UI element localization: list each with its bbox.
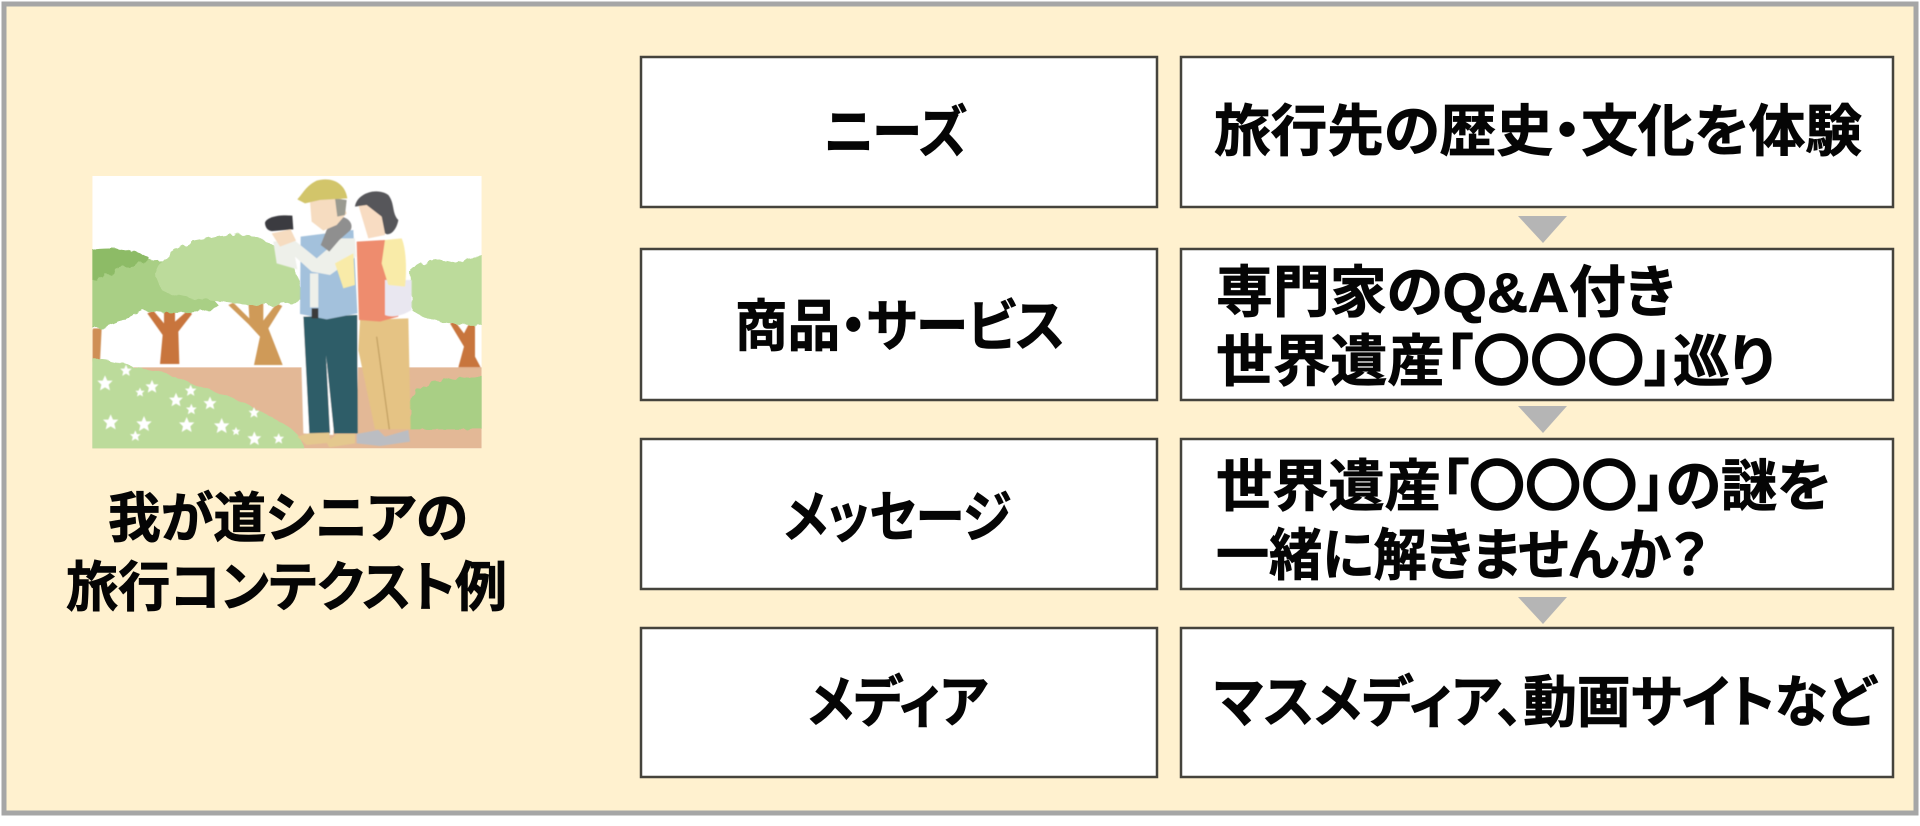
man [265, 179, 359, 447]
row 2 content: 世界遺産「〇〇〇」巡り [1216, 330, 1775, 393]
woman [335, 191, 412, 446]
path [92, 367, 482, 448]
row 4 content: マスメディア、動画サイトなど [1214, 671, 1879, 734]
heading: 旅行コンテクスト例 [66, 558, 507, 618]
row 1 content [1181, 57, 1893, 207]
flower bush [88, 359, 305, 452]
row 2 content [1181, 249, 1893, 400]
flowers [97, 365, 284, 445]
row 1 content: 旅行先の歴史・文化を体験 [1214, 100, 1862, 163]
row 3 label: message [641, 439, 1157, 589]
row 2 content: 専門家のQ&A付き [1216, 261, 1675, 324]
row 3 content: 一緒に解きませんか？ [1216, 524, 1708, 587]
heading: 我が道シニアの [108, 489, 468, 549]
row 4 label: media: メディア [808, 671, 988, 734]
illustration: senior couple taking a photo in a park [88, 176, 488, 452]
row 2 label: product and service [641, 249, 1157, 400]
trunks [92, 302, 481, 367]
row 4 label: media [641, 628, 1157, 777]
arrow 1 [1518, 216, 1567, 243]
row 3 content [1181, 439, 1893, 589]
row 4 content [1181, 628, 1893, 777]
row 3 label: message: メッセージ [784, 486, 1011, 549]
right bush [410, 375, 488, 429]
tree foliage [90, 235, 487, 330]
row 3 content: 世界遺産「〇〇〇」の謎を [1216, 455, 1831, 518]
arrow 2 [1518, 406, 1567, 433]
row 1 label: needs: ニーズ [824, 101, 967, 164]
arrow 3 [1518, 597, 1567, 624]
row 2 label: product and service: 商品・サービス [735, 295, 1065, 358]
heading [66, 489, 507, 618]
row 1 label: needs [641, 57, 1157, 207]
